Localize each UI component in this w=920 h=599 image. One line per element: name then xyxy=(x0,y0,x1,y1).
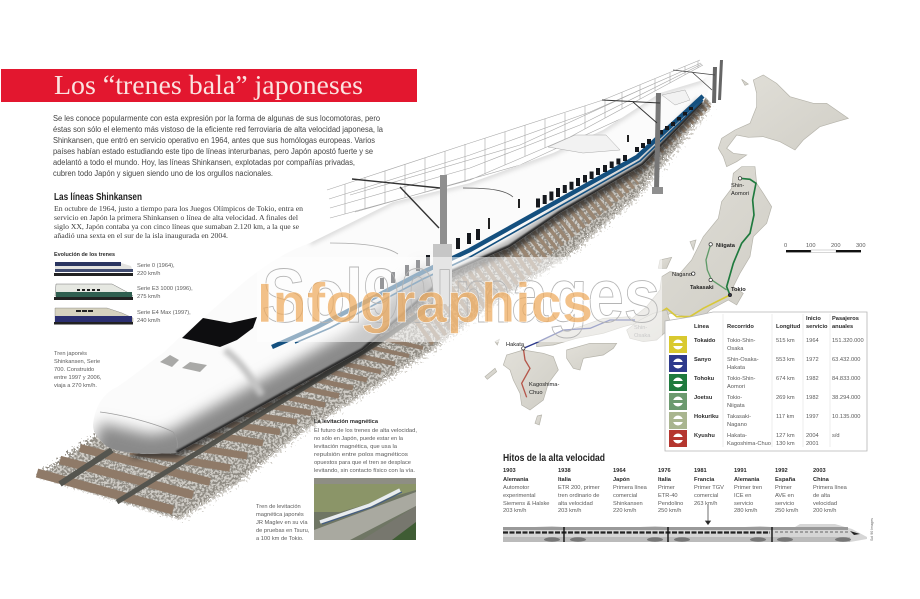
train evolution: 275 km/h xyxy=(137,294,160,300)
map scale bar: 200 xyxy=(831,243,840,249)
row Joetsu: Niigata xyxy=(727,403,746,409)
row Sanyo: 553 km xyxy=(776,357,795,363)
milestone 1992: España xyxy=(775,477,796,483)
magnetic levitation text xyxy=(314,419,417,474)
map scale bar xyxy=(784,243,866,252)
milestone 1938: ETR 200, primer xyxy=(558,485,600,491)
milestone 1991: 1991 xyxy=(734,468,747,474)
milestone 2003: 200 km/h xyxy=(813,508,836,514)
milestone 1992: AVE en xyxy=(775,493,794,499)
milestone 1981: 1981 xyxy=(694,468,707,474)
milestone 1991 xyxy=(734,468,762,514)
pole 2 xyxy=(602,93,663,194)
row Sanyo: 1972 xyxy=(806,357,819,363)
row Joetsu xyxy=(669,393,860,410)
train evolution: Serie E4 Max (1997), xyxy=(137,310,191,316)
small train: Serie E4 Max xyxy=(54,308,133,324)
row Tokaido xyxy=(669,336,864,353)
row Tohoku: 1982 xyxy=(806,376,819,382)
row Hokuriku: Nagano xyxy=(727,422,747,428)
caption: Serie 700: Shinkansen, Serie xyxy=(54,359,100,365)
map labels: Shin- xyxy=(634,325,647,331)
magnetic levitation text: no sólo en Japón, puede estar en la xyxy=(314,436,404,442)
map labels xyxy=(506,183,749,396)
pole 1 xyxy=(352,175,452,304)
row Tokaido: Tokaido xyxy=(694,338,716,344)
milestone 1992: Primer xyxy=(775,485,792,491)
pantograph covers xyxy=(330,90,690,254)
small train: Serie E3 1000 xyxy=(54,284,133,300)
maglev caption: magnética japonés xyxy=(256,512,304,518)
row Kyushu: 130 km xyxy=(776,441,795,447)
milestone 1964: Primera línea xyxy=(613,485,648,491)
milestone 1992 xyxy=(775,468,798,514)
map labels: Niigata xyxy=(716,243,736,249)
map: islands south xyxy=(485,310,672,425)
train evolution: 220 km/h xyxy=(137,271,160,277)
map labels: Osaka xyxy=(634,333,651,339)
title banner: Los “trenes bala” japoneses xyxy=(54,69,363,100)
maglev caption: a 100 km de Tokio. xyxy=(256,536,304,542)
milestone 1964: 220 km/h xyxy=(613,508,636,514)
map labels: Takasaki xyxy=(690,285,714,291)
milestone 1903: experimental xyxy=(503,493,536,499)
magnetic levitation text: repulsión entre polos magnéticos xyxy=(314,452,408,458)
side-view train xyxy=(503,524,867,542)
intro text: países habían estado estudiando este tipo de líneas interurbanas, pero Japón apostó fuerte y se xyxy=(53,147,374,156)
train evolution: Serie 0 (1964), xyxy=(137,263,175,269)
row Hokuriku: 1997 xyxy=(806,414,819,420)
magnetic levitation text: levitando, sin contacto físico con la vía. xyxy=(314,468,415,474)
magnetic levitation text: El futuro de los trenes de alta velocidad, xyxy=(314,428,417,434)
intro text: cubren todo Japón y siguen siendo uno de los orgullos nacionales. xyxy=(53,169,273,178)
caption: Serie 700: Tren japonés xyxy=(54,351,87,357)
row Kyushu xyxy=(669,430,840,447)
row Tokaido: 1964 xyxy=(806,338,819,344)
milestone 1938: 1938 xyxy=(558,468,571,474)
infographic canvas xyxy=(1,60,874,542)
milestone 2003: de alta xyxy=(813,493,831,499)
milestone 2003: Primera línea xyxy=(813,485,848,491)
milestone 1981 xyxy=(694,468,724,507)
milestone 1938: tren ordinario de xyxy=(558,493,599,499)
map scale bar: 0 xyxy=(784,243,787,249)
watermark: Sol90Images xyxy=(262,254,660,339)
row Joetsu: Joetsu xyxy=(694,395,713,401)
milestone 1981: Primer TGV xyxy=(694,485,724,491)
row Kyushu: 2004 xyxy=(806,433,819,439)
milestone 1976: Pendolino xyxy=(658,501,683,507)
table of lines xyxy=(665,312,867,451)
milestone 1991: Alemania xyxy=(734,477,760,483)
milestone 1991: 280 km/h xyxy=(734,508,757,514)
milestone 2003: China xyxy=(813,477,830,483)
nose crease xyxy=(100,412,177,448)
milestone 1991: servicio xyxy=(734,501,753,507)
train evolution: Serie E3 1000 (1996), xyxy=(137,286,193,292)
headlights xyxy=(160,355,207,372)
map: Tohoku line xyxy=(727,178,756,295)
map labels: Shin- xyxy=(731,183,744,189)
row Sanyo: Hakata xyxy=(727,365,746,371)
intro text: Shinkansen, que entró en servicio operativo en 1964, antes que sus homólogas europeas. Varios xyxy=(53,136,375,145)
row Kyushu: 127 km xyxy=(776,433,795,439)
milestone 1903: Siemens & Halske xyxy=(503,501,549,507)
bullet train Series 700 xyxy=(93,72,712,458)
milestone 1964 xyxy=(613,468,648,514)
row Tokaido: 515 km xyxy=(776,338,795,344)
milestone 1964: comercial xyxy=(613,493,637,499)
credit: Sol 90 Images xyxy=(870,518,874,541)
map scale bar: 300 xyxy=(856,243,866,249)
section: Las líneas Shinkansen: añadió una sexta en el sur de la isla inaugurada en 2004. xyxy=(54,232,228,240)
row Tohoku: 84.833.000 xyxy=(832,376,860,382)
maglev caption: JR Maglev en su vía xyxy=(256,520,308,526)
milestone 1991: ICE en xyxy=(734,493,751,499)
table header: servicio xyxy=(806,324,828,330)
map: Tokaido line xyxy=(643,295,730,323)
milestone 2003: 2003 xyxy=(813,468,826,474)
milestone 1992: servicio xyxy=(775,501,794,507)
milestone 1964: Shinkansen xyxy=(613,501,643,507)
milestone 1903: 1903 xyxy=(503,468,516,474)
magnetic levitation text: levitación magnética, que usa la xyxy=(314,444,398,450)
magnetic levitation text: La levitación magnética xyxy=(314,419,379,425)
blue stripes xyxy=(272,96,703,347)
windows xyxy=(382,107,691,289)
section: Las líneas Shinkansen: Las líneas Shinkansen xyxy=(54,192,142,203)
ballast speckle xyxy=(37,90,712,520)
intro text: Se les conoce popularmente con esta expresión por la forma de algunas de sus locomotoras, pero xyxy=(53,114,381,123)
row Hokuriku: Takasaki- xyxy=(727,414,751,420)
caption: Serie 700: entre 1997 y 2006, xyxy=(54,375,102,381)
section: Las líneas Shinkansen: siglo XX, Japón contaba ya con cinco líneas que sumaban 2.120 km, a la que se xyxy=(54,223,299,231)
map labels: Nagano xyxy=(672,272,692,278)
milestone 1903: Alemania xyxy=(503,477,529,483)
watermark: Infographics xyxy=(257,271,593,334)
map scale bar: 100 xyxy=(806,243,816,249)
catenary poles xyxy=(352,60,723,304)
row Sanyo: Sanyo xyxy=(694,357,712,363)
train evolution: 240 km/h xyxy=(137,318,160,324)
maglev caption xyxy=(256,504,310,542)
milestone 1964: Japón xyxy=(613,477,630,483)
pole 3 xyxy=(673,60,723,103)
milestone 1903 xyxy=(503,468,549,514)
row Joetsu: 38.294.000 xyxy=(832,395,860,401)
train body xyxy=(93,72,712,454)
milestone 1938: 203 km/h xyxy=(558,508,581,514)
track xyxy=(37,90,712,520)
section: Las líneas Shinkansen: servicio en Japón la primera Shinkansen o línea de alta velocidad. A finales del xyxy=(54,214,298,222)
train shadow xyxy=(130,100,707,458)
row Sanyo: 63.432.000 xyxy=(832,357,860,363)
table header: Pasajeros xyxy=(832,316,859,322)
row Tokaido: Osaka xyxy=(727,346,744,352)
milestones timeline xyxy=(503,468,848,524)
map: Kyushu line xyxy=(522,348,530,397)
caption: Serie 700: 700. Construido xyxy=(54,367,94,373)
table header: anuales xyxy=(832,324,853,330)
map labels: Tokio xyxy=(731,287,746,293)
map labels: Kagoshima- xyxy=(529,382,559,388)
row Sanyo: Shin-Osaka- xyxy=(727,357,759,363)
table header xyxy=(694,316,859,330)
map labels: Hakata xyxy=(506,342,525,348)
map: Joetsu line xyxy=(706,244,727,290)
row Tohoku: Tokio-Shin- xyxy=(727,376,756,382)
near sleepers xyxy=(37,330,423,510)
row Tokaido: Tokio-Shin- xyxy=(727,338,756,344)
maglev caption: Tren de levitación xyxy=(256,504,301,510)
row Tohoku: Tohoku xyxy=(694,376,715,382)
table header: Inicio xyxy=(806,316,821,322)
intro text: éstas son sólo el elemento más vistoso de la eficiente red ferroviaria de alta velocidad japonesa, la xyxy=(53,125,384,134)
milestone 2003: velocidad xyxy=(813,501,837,507)
milestone 1903: 203 km/h xyxy=(503,508,526,514)
arrow to train xyxy=(706,505,710,524)
intro text xyxy=(53,114,384,178)
row Hokuriku: 10.135.000 xyxy=(832,414,860,420)
map: islands north xyxy=(630,75,848,327)
row Hokuriku: Hokuriku xyxy=(694,414,719,420)
milestone 1976 xyxy=(658,468,683,514)
row Hokuriku: 117 km xyxy=(776,414,794,420)
row Tohoku: 674 km xyxy=(776,376,795,382)
train evolution: Evolución de los trenes xyxy=(54,252,115,258)
row Joetsu: 1982 xyxy=(806,395,819,401)
map: Sanyo line xyxy=(523,320,635,348)
intro text: adelantó a todo el mundo. Hoy, las líneas Shinkansen, explotadas por compañías privadas, xyxy=(53,158,355,167)
train evolution xyxy=(54,252,193,324)
row Kyushu: Kagoshima-Chuo xyxy=(727,441,771,447)
milestone 1992: 1992 xyxy=(775,468,788,474)
section: Las líneas Shinkansen: En octubre de 1964, justo a tiempo para los Juegos Olímpicos de Tokio, entra en xyxy=(54,205,303,213)
magnetic levitation text: opuestos para que el tren se desplace xyxy=(314,460,411,466)
milestone 1981: Francia xyxy=(694,477,715,483)
milestone 1976: ETR-40 xyxy=(658,493,678,499)
milestone 1981: comercial xyxy=(694,493,718,499)
row Joetsu: Tokio- xyxy=(727,395,742,401)
map labels: Aomori xyxy=(731,191,749,197)
milestone 1903: Automotor xyxy=(503,485,529,491)
milestone 1976: 1976 xyxy=(658,468,671,474)
milestone 1938: Italia xyxy=(558,477,572,483)
small train: Serie 0 xyxy=(54,262,133,276)
map of Japan xyxy=(485,75,848,425)
maglev photo xyxy=(314,478,416,540)
row Kyushu: Hakata- xyxy=(727,433,747,439)
row Tokaido: 151.320.000 xyxy=(832,338,864,344)
row Tohoku: Aomori xyxy=(727,384,745,390)
map labels: Chuo xyxy=(529,390,543,396)
milestone 2003 xyxy=(813,468,848,514)
title banner xyxy=(1,69,417,102)
caption: Serie 700 xyxy=(54,351,102,389)
ballast base xyxy=(37,90,712,520)
milestone 1976: Primer xyxy=(658,485,675,491)
caption: Serie 700: viaja a 270 km/h. xyxy=(54,383,97,389)
milestone 1976: Italia xyxy=(658,477,672,483)
far sleepers xyxy=(420,100,705,330)
milestone 1938: alta velocidad xyxy=(558,501,593,507)
section: Las líneas Shinkansen xyxy=(54,192,303,240)
row Kyushu: s/d xyxy=(832,433,840,439)
table header: Longitud xyxy=(776,324,801,330)
rails xyxy=(60,300,440,502)
row Tohoku xyxy=(669,374,860,391)
milestone 1976: 250 km/h xyxy=(658,508,681,514)
row Kyushu: 2001 xyxy=(806,441,819,447)
maglev caption: de pruebas en Tsuru, xyxy=(256,528,310,534)
row Joetsu: 269 km xyxy=(776,395,795,401)
milestones heading: Hitos de la alta velocidad xyxy=(503,452,605,464)
milestone 1964: 1964 xyxy=(613,468,626,474)
milestone 1992: 250 km/h xyxy=(775,508,798,514)
car doors xyxy=(489,135,628,229)
catenary fence wireframe xyxy=(327,60,703,218)
milestone 1991: Primer tren xyxy=(734,485,762,491)
windshield xyxy=(182,317,257,347)
table header: Recorrido xyxy=(727,324,754,330)
table header: Línea xyxy=(694,324,710,330)
milestone 1938 xyxy=(558,468,600,514)
milestone 1981: 263 km/h xyxy=(694,501,717,507)
body shading xyxy=(95,80,703,458)
row Sanyo xyxy=(669,355,860,372)
row Hokuriku xyxy=(669,412,860,429)
row Kyushu: Kyushu xyxy=(694,433,715,439)
